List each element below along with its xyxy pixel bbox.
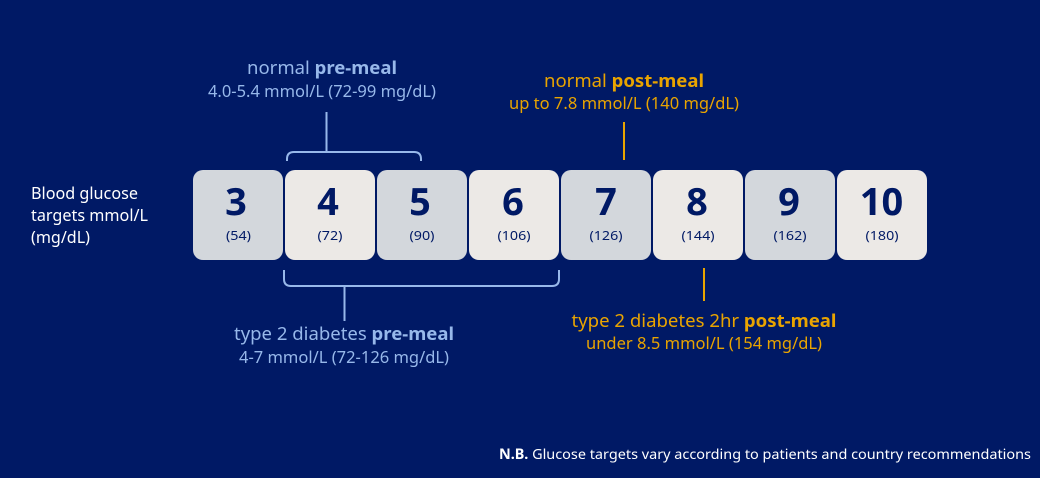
callout: normal post-meal: normal post-meal <box>544 69 704 93</box>
tile 5: 5 <box>409 175 431 227</box>
callout: type 2 diabetes post-meal: under 8.5 mmol/L (154 mg/dL) <box>586 332 822 354</box>
tile 3: 3 <box>225 175 247 227</box>
tile 7: (126) <box>590 226 623 244</box>
tile 4: (72) <box>318 226 343 244</box>
line: normal post-meal marker <box>623 122 625 160</box>
tile 3: (54) <box>226 226 251 244</box>
row label: targets mmol/L <box>31 204 148 226</box>
bracket: normal pre-meal range <box>287 112 421 161</box>
tile 5 <box>377 170 467 260</box>
footnote: N.B. Glucose targets vary according to patients and country recommendations <box>499 445 1031 464</box>
callout: type 2 diabetes pre-meal: 4-7 mmol/L (72-126 mg/dL) <box>239 346 449 368</box>
tile 5: (90) <box>410 226 435 244</box>
tile 10 <box>837 170 927 260</box>
line: type 2 post-meal marker <box>703 268 705 301</box>
tile 10: (180) <box>866 226 899 244</box>
callout: normal post-meal: up to 7.8 mmol/L (140 mg/dL) <box>509 92 739 114</box>
tile 4: 4 <box>317 175 339 227</box>
row label: (mg/dL) <box>31 226 90 248</box>
bracket: type 2 pre-meal range <box>284 270 559 321</box>
row label: Blood glucose <box>31 182 138 204</box>
scale tiles <box>193 170 927 260</box>
tile 9: 9 <box>778 175 800 227</box>
tile 7: 7 <box>595 175 617 227</box>
row label <box>31 182 148 248</box>
tile 8: 8 <box>686 175 708 227</box>
tile 3 <box>193 170 283 260</box>
tile 6: (106) <box>498 226 531 244</box>
tile 9 <box>745 170 835 260</box>
tile 8: (144) <box>682 226 715 244</box>
tile 8 <box>653 170 743 260</box>
tile 6 <box>469 170 559 260</box>
tile 6: 6 <box>502 175 524 227</box>
tile 9: (162) <box>774 226 807 244</box>
callout: type 2 diabetes pre-meal <box>234 322 454 368</box>
tile 4 <box>285 170 375 260</box>
callout: normal pre-meal <box>208 56 436 102</box>
callout: normal pre-meal: normal pre-meal <box>247 56 397 80</box>
callout: type 2 diabetes pre-meal: type 2 diabetes pre-meal <box>234 322 454 346</box>
callout: normal pre-meal: 4.0-5.4 mmol/L (72-99 mg/dL) <box>208 80 436 102</box>
callout: type 2 diabetes post-meal <box>572 309 836 354</box>
callout: normal post-meal <box>509 69 739 114</box>
tile 10: 10 <box>860 175 903 227</box>
callout: type 2 diabetes post-meal: type 2 diabetes 2hr post-meal <box>572 309 836 333</box>
tile 7 <box>561 170 651 260</box>
